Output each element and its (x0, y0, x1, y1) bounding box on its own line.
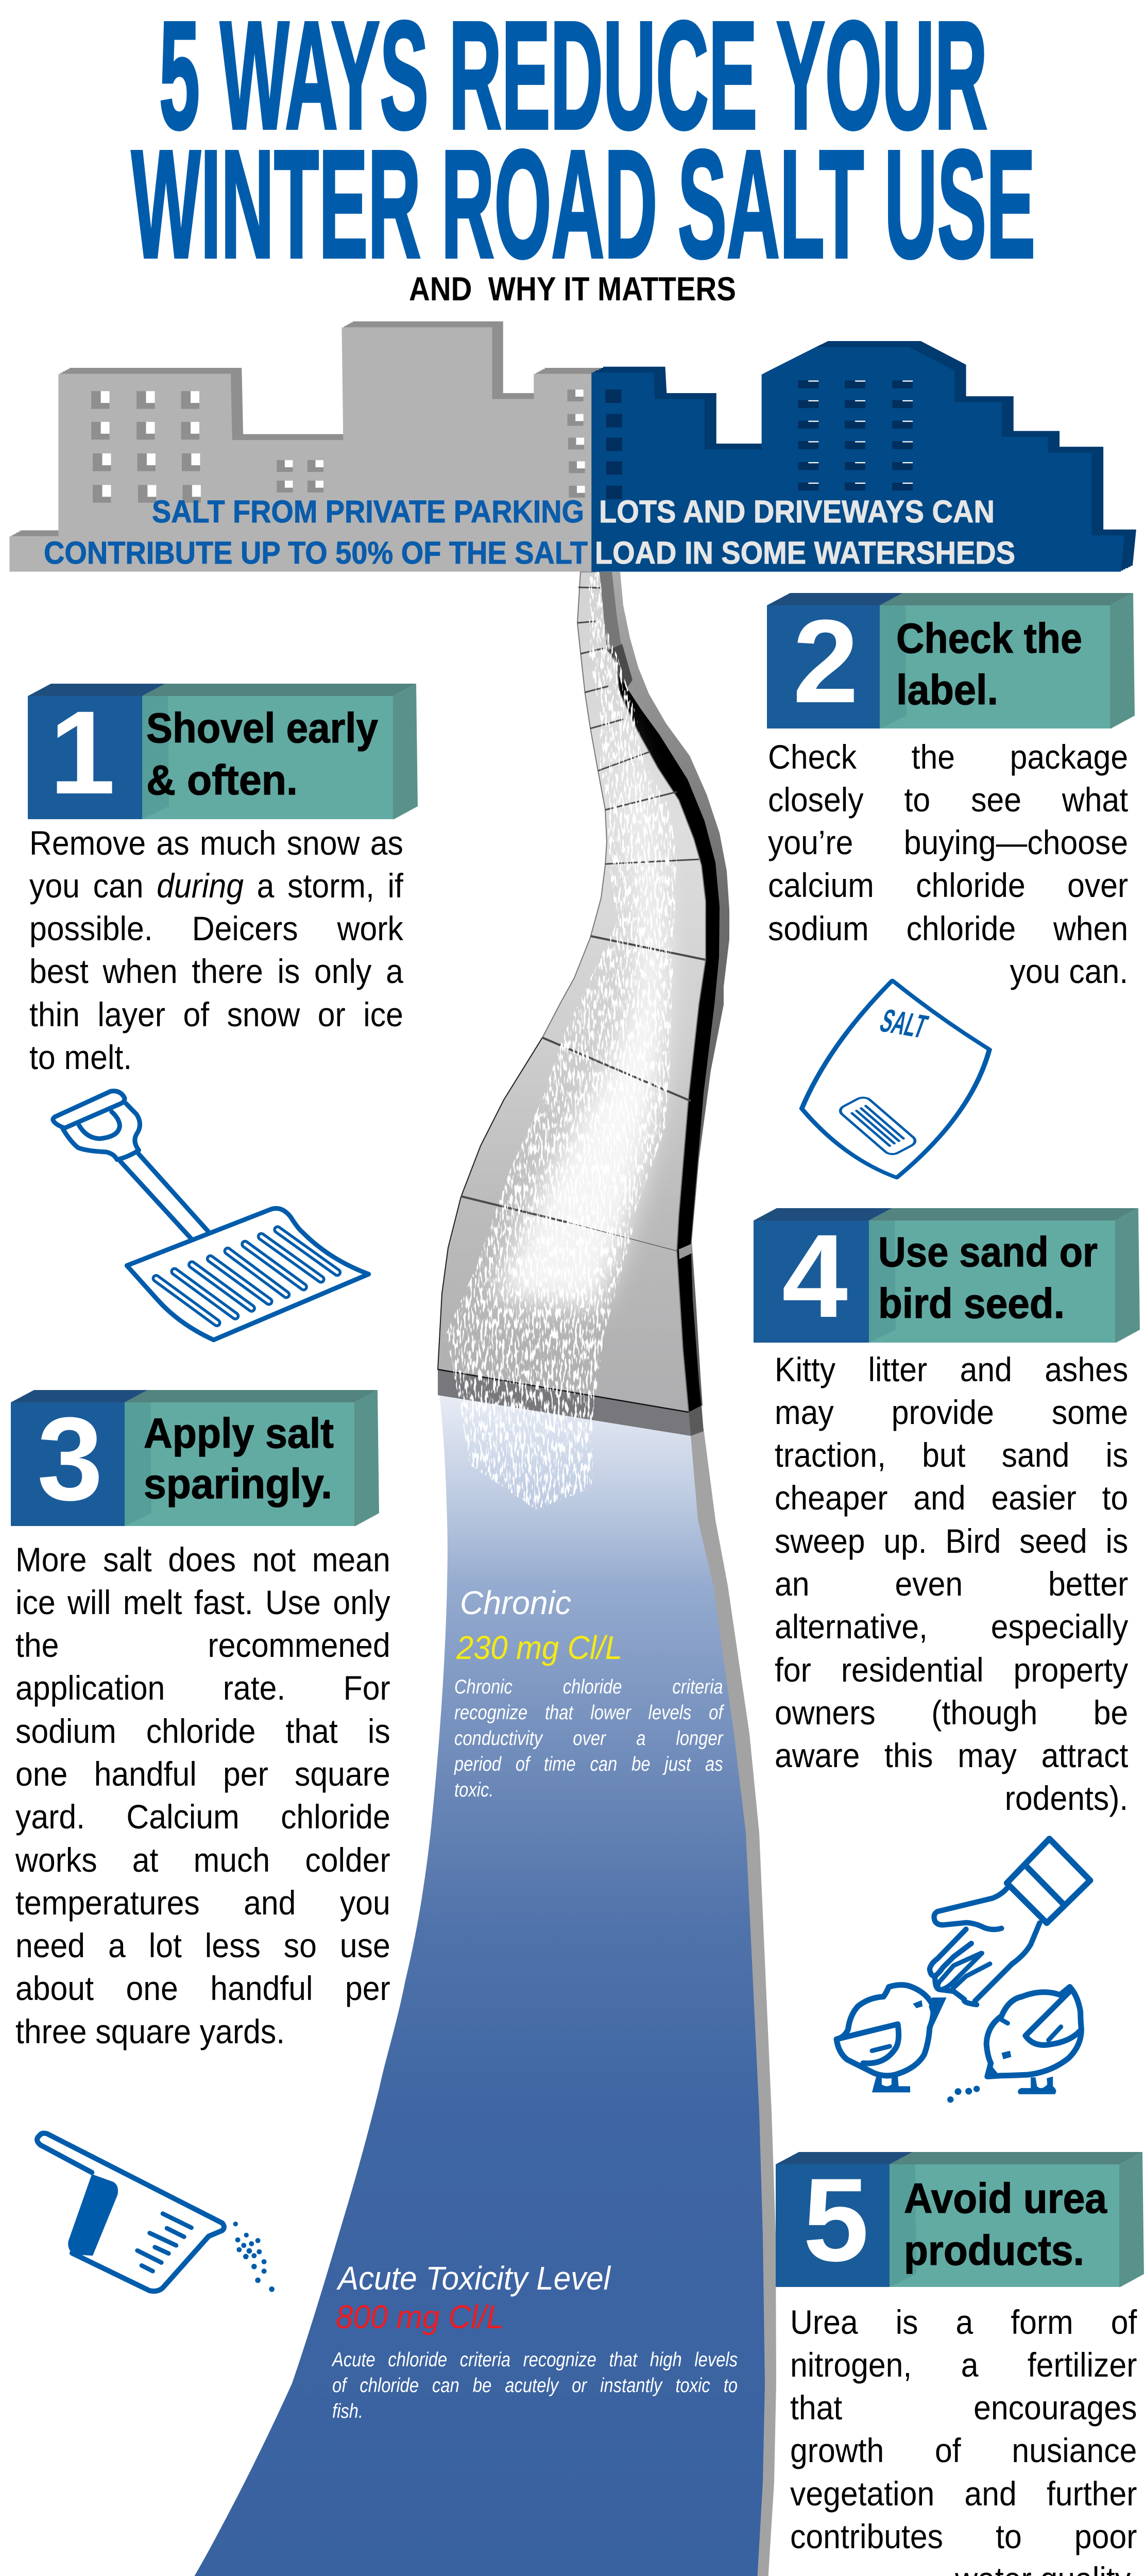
acute toxicity callout (331, 2260, 738, 2422)
text: step 1 advice: thin layer of snow or ice (29, 995, 403, 1033)
text: step 5 advice: that encourages (790, 2388, 1137, 2427)
badge: 1 shovel early and often (28, 684, 418, 819)
badge: 3 apply salt sparingly (11, 1390, 379, 1526)
text: step 2 advice: you can. (1010, 952, 1128, 990)
banner statement: LOAD IN SOME WATERSHEDS (595, 535, 1015, 570)
chronic description: recognize that lower levels of (454, 1702, 723, 1724)
banner statement (44, 494, 1015, 570)
chronic description (454, 1676, 724, 1801)
text: step 1 advice: Remove as much snow as (29, 823, 403, 861)
acute heading and value: Acute Toxicity Level (336, 2260, 611, 2297)
acute description: fish. (332, 2400, 363, 2422)
text: step 1 advice: you can during a storm, if (29, 867, 403, 905)
badge: 5 avoid urea products: products. (904, 2227, 1084, 2274)
badge: 3 apply salt sparingly: 3 (37, 1393, 103, 1525)
badge: 1 shovel early and often: Shovel early (146, 705, 378, 752)
text: step 1 advice: to melt. (29, 1038, 132, 1076)
text: step 5 advice: nitrogen, a fertilizer (790, 2346, 1137, 2384)
text: step 3 advice: temperatures and you (15, 1884, 390, 1922)
icon: salt bag (799, 979, 992, 1180)
text: step 4 advice: owners (though be (775, 1693, 1128, 1732)
text: step 3 advice: need a lot less so use (15, 1926, 390, 1964)
chronic description: Chronic chloride criteria (454, 1676, 723, 1698)
chronic heading and value: Chronic (460, 1584, 571, 1621)
text: step 3 advice: about one handful per (15, 1969, 390, 2007)
acute description: of chloride can be acutely or instantly toxic to (332, 2375, 738, 2397)
text: step 5 advice: contributes to poor (790, 2517, 1137, 2555)
text: step 3 advice (15, 1540, 390, 2050)
badge: 3 apply salt sparingly: Apply salt (144, 1410, 334, 1457)
banner statement: SALT FROM PRIVATE PARKING (152, 494, 584, 529)
water column (0, 1391, 765, 2576)
icon: snow shovel (50, 1089, 371, 1343)
banner statement: LOTS AND DRIVEWAYS CAN (599, 494, 995, 529)
text: step 4 advice: aware this may attract (775, 1736, 1128, 1774)
panel: step 2 (767, 593, 1135, 1180)
text: step 4 advice: an even better (775, 1565, 1128, 1603)
gray riverbank strip (690, 1429, 776, 2576)
badge: 4 use sand or bird seed: Use sand or (878, 1229, 1098, 1276)
panel: step 4 (754, 1208, 1140, 2103)
title (130, 0, 1035, 308)
city skyline banner (9, 321, 1136, 572)
icon: salt bag: SALT (876, 1002, 932, 1045)
text: step 4 advice: rodents). (1005, 1779, 1128, 1817)
text: step 4 advice: may provide some (775, 1393, 1128, 1431)
text: step 2 advice: Check the package (768, 738, 1128, 776)
badge: 2 check the label: Check the (896, 615, 1082, 662)
badge: 1 shovel early and often: & often. (146, 757, 298, 804)
badge: 4 use sand or bird seed (754, 1208, 1140, 1343)
text: step 3 advice: works at much colder (15, 1841, 390, 1879)
acute description (331, 2349, 738, 2422)
badge: 4 use sand or bird seed: bird seed. (878, 1280, 1065, 1327)
banner statement: CONTRIBUTE UP TO 50% OF THE SALT (44, 535, 588, 570)
badge: 5 avoid urea products: Avoid urea (904, 2175, 1107, 2222)
badge: 1 shovel early and often: 1 (49, 686, 115, 819)
text: step 4 advice: Kitty litter and ashes (775, 1350, 1128, 1388)
panel: step 1 (28, 684, 418, 1343)
text: step 4 advice: traction, but sand is (775, 1436, 1128, 1474)
panel: step 3 (11, 1390, 390, 2294)
text: step 4 advice (775, 1348, 1128, 1820)
chronic heading and value: 230 mg Cl/L (456, 1629, 622, 1666)
text: step 3 advice: three square yards. (15, 2012, 285, 2050)
badge: 3 apply salt sparingly: sparingly. (144, 1461, 332, 1507)
acute heading and value (336, 2260, 611, 2335)
subtitle: AND WHY IT MATTERS (409, 270, 736, 308)
text: step 1 advice: best when there is only a (29, 952, 403, 990)
chronic description: conductivity over a longer (454, 1727, 723, 1750)
text: step 1 advice (29, 823, 403, 1076)
chronic description: period of time can be just as (454, 1753, 723, 1775)
chronic toxicity callout (454, 1584, 724, 1801)
chronic heading and value (456, 1584, 622, 1666)
badge: 2 check the label (767, 593, 1135, 728)
text: step 4 advice: cheaper and easier to (775, 1479, 1128, 1517)
text: step 3 advice: yard. Calcium chloride (15, 1798, 390, 1836)
text: step 1 advice: possible. Deicers work (29, 909, 403, 947)
text: step 2 advice (768, 738, 1128, 990)
salt pile column (438, 572, 729, 1436)
salt glow, section lines and white speckle (446, 572, 706, 1510)
badge: 4 use sand or bird seed: 4 (782, 1210, 848, 1342)
acute description: Acute chloride criteria recognize that high levels (332, 2349, 738, 2371)
text: step 3 advice: sodium chloride that is (15, 1712, 390, 1750)
text: step 2 advice: calcium chloride over (768, 866, 1128, 904)
badge: 5 avoid urea products (776, 2152, 1145, 2287)
blue half of skyline (591, 341, 1136, 572)
text: step 5 advice (790, 2301, 1137, 2576)
text: step 4 advice: sweep up. Bird seed is (775, 1522, 1128, 1560)
text: step 3 advice: the recommened (15, 1626, 390, 1664)
gray half of skyline (9, 321, 603, 572)
acute heading and value: 800 mg Cl/L (336, 2298, 504, 2335)
text: step 3 advice: one handful per square (15, 1755, 390, 1793)
text: step 4 advice: for residential property (775, 1651, 1128, 1689)
text: step 2 advice: closely to see what (768, 781, 1128, 819)
badge: 2 check the label: 2 (793, 595, 859, 727)
text: step 5 advice: vegetation and further (790, 2475, 1137, 2513)
text: step 3 advice: More salt does not mean (15, 1540, 390, 1579)
text: step 4 advice: alternative, especially (775, 1607, 1128, 1646)
badge: 2 check the label: label. (896, 667, 998, 714)
text: step 5 advice: growth of nusiance (790, 2431, 1137, 2469)
icon: hand feeding birds (829, 1832, 1100, 2105)
badge: 5 avoid urea products: 5 (803, 2154, 869, 2286)
icon: measuring cup pouring salt (35, 2131, 275, 2294)
text: step 3 advice: application rate. For (15, 1669, 390, 1707)
text: step 2 advice: sodium chloride when (768, 909, 1128, 947)
panel: step 5 (773, 2148, 1145, 2576)
text: step 5 advice: Urea is a form of (790, 2303, 1137, 2341)
chronic description: toxic. (454, 1779, 493, 1801)
text: step 3 advice: ice will melt fast. Use only (15, 1583, 390, 1621)
text: step 2 advice: you’re buying—choose (768, 823, 1128, 861)
